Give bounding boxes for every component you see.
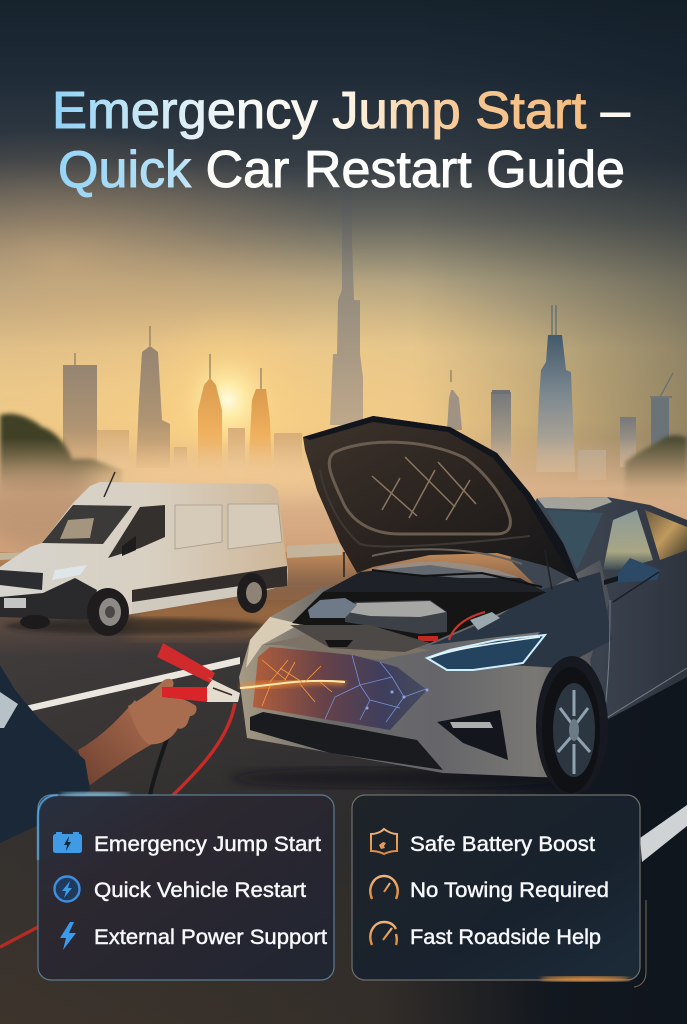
wing mirror (617, 558, 660, 583)
title (52, 82, 630, 199)
item: Safe Battery Boost: Safe Battery Boost (410, 833, 595, 856)
item: No Towing Required: No Towing Required (410, 879, 609, 902)
bonnet inner panels (320, 442, 530, 564)
item: Quick Vehicle Restart: Quick Vehicle Restart (94, 879, 306, 902)
van (0, 472, 288, 636)
side windows (603, 510, 653, 570)
van body (0, 482, 288, 620)
road (0, 552, 687, 1024)
battery and engine (345, 600, 447, 634)
energy web (325, 655, 428, 722)
sun glow (138, 305, 318, 495)
item: External Power Support: External Power Support (94, 926, 327, 949)
icon: lightning bolt (60, 922, 76, 950)
red clamp (157, 643, 240, 702)
van lower band (132, 566, 287, 612)
jump spark (240, 660, 345, 706)
front wheel (542, 667, 600, 793)
hood scoop (290, 625, 430, 652)
forearm (78, 700, 160, 785)
van side window (108, 505, 165, 558)
bumper intake (250, 712, 443, 770)
headlight (427, 635, 545, 670)
van bumper (0, 578, 97, 620)
van headlight (52, 565, 87, 580)
van antenna (104, 472, 115, 497)
item: Fast Roadside Help: Fast Roadside Help (410, 926, 601, 949)
car roof and side (510, 497, 687, 722)
title: Emergency Jump Start – (52, 82, 630, 140)
icon: circled bolt (54, 876, 80, 902)
wipers (372, 570, 542, 587)
mechanic arm (0, 665, 197, 843)
car front body (239, 560, 610, 778)
grille panel (253, 647, 427, 730)
haze over horizon (0, 438, 687, 563)
icon: battery (53, 832, 82, 853)
panel: benefits (352, 795, 646, 987)
van windshield (42, 505, 132, 544)
icon: speedometer (370, 922, 397, 945)
road marking (25, 657, 687, 862)
windshield (547, 510, 603, 570)
icon: shield (371, 829, 397, 854)
hand (128, 679, 197, 744)
city skyline (63, 130, 673, 483)
van wheels (20, 615, 50, 629)
jumper cables (0, 703, 235, 947)
sleeve (0, 665, 90, 843)
background: sunset sky (0, 0, 687, 600)
guard rail (0, 543, 342, 560)
red cable under hood (449, 612, 485, 640)
title: Quick Car Restart Guide (58, 141, 625, 199)
door line (600, 600, 687, 722)
car (230, 416, 687, 796)
panel: emergency features (38, 792, 334, 980)
reservoir (308, 598, 357, 618)
engine bay (292, 592, 547, 643)
trees (0, 414, 687, 498)
icon: gauge (370, 876, 398, 899)
item: Emergency Jump Start: Emergency Jump Start (94, 833, 321, 856)
bonnet (303, 416, 579, 582)
fog lamp intake (437, 710, 508, 760)
wheel arch (536, 656, 608, 796)
hood struts (344, 550, 552, 590)
